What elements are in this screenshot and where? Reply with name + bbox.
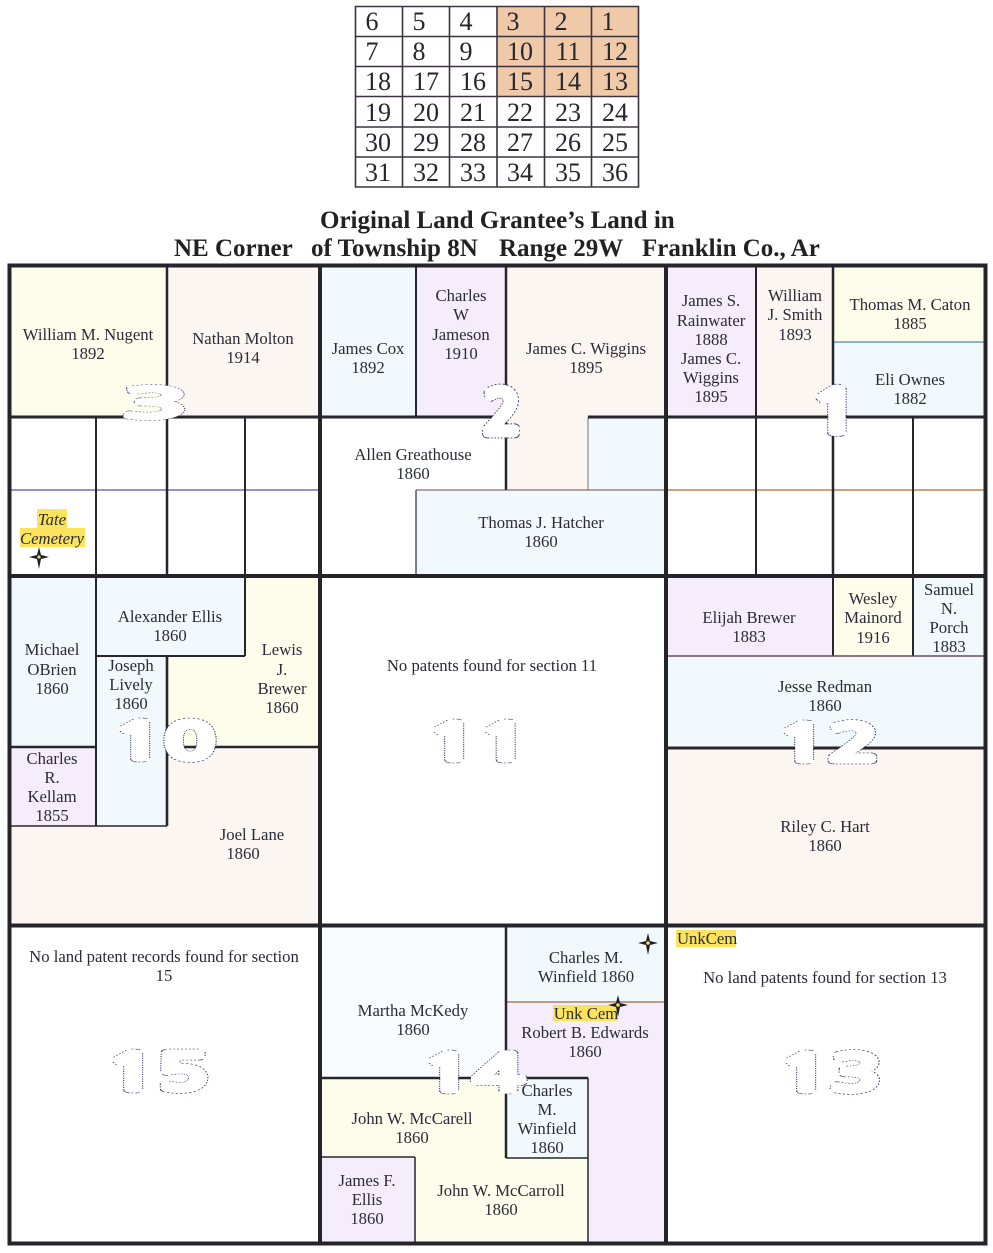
panel: section 15 — [9, 925, 320, 1243]
panel: section 1 — [666, 265, 985, 576]
township locator grid: 34 — [507, 158, 533, 187]
section number 2: 2 — [483, 384, 521, 444]
section number 1: 1 — [809, 382, 861, 442]
township locator grid: 30 — [365, 128, 391, 157]
section number 15: 15 — [105, 1048, 209, 1098]
panel: section 12 — [666, 578, 985, 925]
panel: section 1: Rainwater — [677, 311, 746, 330]
panel: section 10: OBrien — [27, 660, 77, 679]
panel: section 1: 1882 — [893, 389, 927, 408]
township locator grid: 7 — [366, 37, 378, 66]
township locator grid: 27 — [507, 128, 533, 157]
panel: section 11 — [320, 576, 666, 925]
township locator grid: 33 — [460, 158, 486, 187]
panel: section 10: 1860 — [153, 626, 187, 645]
panel: section 14: 1860 — [530, 1138, 564, 1157]
panel: section 14: John W. McCarell — [352, 1109, 473, 1128]
panel: section 15: 15 — [156, 966, 172, 985]
panel: section 2 — [320, 265, 666, 576]
panel: section 3: 1892 — [71, 344, 105, 363]
township locator grid: 15 — [507, 67, 533, 96]
panel: section 12: Elijah Brewer — [702, 608, 796, 627]
panel: section 14: 1860 — [395, 1128, 429, 1147]
panel: section 10: 1860 — [226, 844, 260, 863]
title — [174, 207, 820, 262]
township locator grid: 35 — [555, 158, 581, 187]
panel: section 13 — [666, 925, 985, 1243]
panel: section 1: James C. — [681, 349, 741, 368]
panel: section 1: J. Smith — [768, 305, 823, 324]
panel: section 1: 1885 — [893, 314, 927, 333]
panel: section 10: Charles — [27, 749, 77, 768]
panel: section 10: Lively — [109, 675, 153, 694]
township locator grid: 21 — [460, 98, 486, 127]
panel: section 3: Cemetery — [20, 529, 85, 548]
panel: section 14: James F. — [338, 1171, 396, 1190]
panel: section 1: 1888 — [694, 330, 728, 349]
panel: section 12: N. — [941, 599, 957, 618]
panel: section 2: 1895 — [569, 358, 603, 377]
section number 1: 1 — [809, 382, 861, 442]
township locator grid: 19 — [365, 98, 391, 127]
panel: section 14: 1860 — [484, 1200, 518, 1219]
township section boundaries — [9, 265, 986, 1244]
panel: section 13: No land patents found for section 13 — [703, 968, 947, 987]
panel: section 2: 1860 — [524, 532, 558, 551]
panel: section 14: Martha McKedy — [358, 1001, 469, 1020]
panel: section 1: Wiggins — [683, 368, 739, 387]
panel: section 12: Jesse Redman — [778, 677, 873, 696]
panel: section 12: 1883 — [732, 627, 766, 646]
panel: section 3: Tate — [38, 510, 67, 529]
township locator grid: 28 — [460, 128, 486, 157]
panel: section 14 — [320, 927, 664, 1243]
title: Range 29W — [499, 235, 623, 262]
panel: section 3 — [9, 265, 320, 576]
panel: section 10: 1860 — [265, 698, 299, 717]
panel: section 10: Lewis — [262, 640, 302, 659]
panel: section 1: 1895 — [694, 387, 728, 406]
panel: section 12: Porch — [930, 618, 969, 637]
township locator grid: 22 — [507, 98, 533, 127]
section number 14: 14 — [421, 1049, 525, 1099]
township locator grid: 12 — [602, 37, 628, 66]
section number 3: 3 — [122, 384, 188, 424]
panel: section 2: Jameson — [432, 325, 490, 344]
section number 13: 13 — [778, 1049, 882, 1099]
title: Franklin Co., Ar — [642, 235, 820, 262]
township locator grid: 17 — [413, 67, 439, 96]
panel: section 2: 1860 — [396, 464, 430, 483]
panel: section 14: Charles M. — [549, 948, 623, 967]
township locator grid: 24 — [602, 98, 628, 127]
township locator grid: 13 — [602, 67, 628, 96]
township locator grid: 3 — [506, 7, 520, 36]
title: of Township 8N — [311, 235, 478, 262]
panel: section 10: R. — [44, 768, 60, 787]
panel: section 13: UnkCem — [677, 929, 737, 948]
section number 11: 11 — [426, 718, 530, 768]
panel: section 14: 1860 — [568, 1042, 602, 1061]
panel: section 12: Mainord — [844, 608, 902, 627]
panel: section 1: 1893 — [778, 325, 812, 344]
panel: section 10: Joseph — [108, 656, 154, 675]
panel: section 14: John W. McCarroll — [437, 1181, 565, 1200]
township locator grid — [355, 6, 638, 187]
section number 14: 14 — [421, 1049, 525, 1099]
township locator grid: 14 — [555, 67, 581, 96]
panel: section 2: W — [453, 305, 469, 324]
section number 13: 13 — [778, 1049, 882, 1099]
township locator grid: 1 — [602, 7, 614, 36]
panel: section 10: Kellam — [27, 787, 77, 806]
panel: section 14: Unk Cem — [554, 1004, 618, 1023]
township locator grid: 31 — [365, 158, 391, 187]
panel: section 10: 1860 — [114, 694, 148, 713]
panel: section 10: Alexander Ellis — [118, 607, 222, 626]
panel: section 10: Michael — [25, 640, 80, 659]
township locator grid: 26 — [555, 128, 581, 157]
section number 10: 10 — [112, 717, 216, 767]
section number 12: 12 — [776, 719, 880, 769]
panel: section 14: Winfield 1860 — [538, 967, 634, 986]
panel: section 14: 1860 — [396, 1020, 430, 1039]
township locator grid: 23 — [555, 98, 581, 127]
panel: section 12: 1916 — [856, 628, 890, 647]
township locator grid: 16 — [460, 67, 486, 96]
panel: section 3: 1914 — [226, 348, 260, 367]
panel: section 3: William M. Nugent — [23, 325, 154, 344]
section number 2: 2 — [483, 384, 521, 444]
township locator grid: 36 — [602, 158, 628, 187]
panel: section 10: 1860 — [35, 679, 69, 698]
panel: section 2: Thomas J. Hatcher — [478, 513, 604, 532]
section number 11: 11 — [426, 718, 530, 768]
township locator grid: 9 — [460, 37, 472, 66]
panel: section 2: James C. Wiggins — [526, 339, 646, 358]
township locator grid: 32 — [413, 158, 439, 187]
title: Original Land Grantee’s Land in — [320, 207, 675, 234]
panel: section 1: William — [768, 286, 822, 305]
panel: section 12: 1860 — [808, 696, 842, 715]
panel: section 11: No patents found for section 11 — [387, 656, 597, 675]
panel: section 2: James Cox — [332, 339, 405, 358]
panel: section 2: 1892 — [351, 358, 385, 377]
panel: section 14: 1860 — [350, 1209, 384, 1228]
panel: section 14: Charles — [522, 1081, 572, 1100]
panel: section 1: James S. — [682, 291, 740, 310]
section number 10: 10 — [112, 717, 216, 767]
panel: section 10: Brewer — [257, 679, 307, 698]
township locator grid: 18 — [365, 67, 391, 96]
panel: section 14: Ellis — [352, 1190, 382, 1209]
panel: section 14: Robert B. Edwards — [521, 1023, 649, 1042]
panel: section 14: M. — [537, 1100, 557, 1119]
panel: section 12: Riley C. Hart — [780, 817, 870, 836]
township locator grid: 29 — [413, 128, 439, 157]
township locator grid: 8 — [412, 37, 426, 66]
township locator grid: 6 — [366, 7, 378, 36]
panel: section 10 — [9, 578, 320, 925]
panel: section 2: 1910 — [444, 344, 478, 363]
township locator grid: 25 — [602, 128, 628, 157]
section number 3: 3 — [122, 384, 188, 424]
township locator grid: 10 — [507, 37, 533, 66]
panel: section 1: Thomas M. Caton — [850, 295, 971, 314]
township locator grid: 20 — [413, 98, 439, 127]
township locator grid: 11 — [555, 37, 581, 66]
panel: section 2: Charles — [436, 286, 486, 305]
panel: section 12: 1883 — [932, 637, 966, 656]
panel: section 14: Winfield — [518, 1119, 577, 1138]
panel: section 12: Wesley — [849, 589, 898, 608]
panel: section 2: Allen Greathouse — [354, 445, 472, 464]
township locator grid: 5 — [412, 7, 426, 36]
panel: section 12: 1860 — [808, 836, 842, 855]
panel: section 10: Joel Lane — [220, 825, 284, 844]
township locator grid: 2 — [554, 7, 568, 36]
township locator grid: 4 — [460, 7, 472, 36]
section number 12: 12 — [776, 719, 880, 769]
panel: section 15: No land patent records found for section — [29, 947, 300, 966]
title: NE Corner — [174, 235, 293, 262]
panel: section 3: Nathan Molton — [192, 329, 294, 348]
panel: section 1: Eli Ownes — [875, 370, 945, 389]
panel: section 12: Samuel — [924, 580, 974, 599]
panel: section 10: 1855 — [35, 806, 69, 825]
section number 15: 15 — [105, 1048, 209, 1098]
panel: section 10: J. — [277, 660, 287, 679]
